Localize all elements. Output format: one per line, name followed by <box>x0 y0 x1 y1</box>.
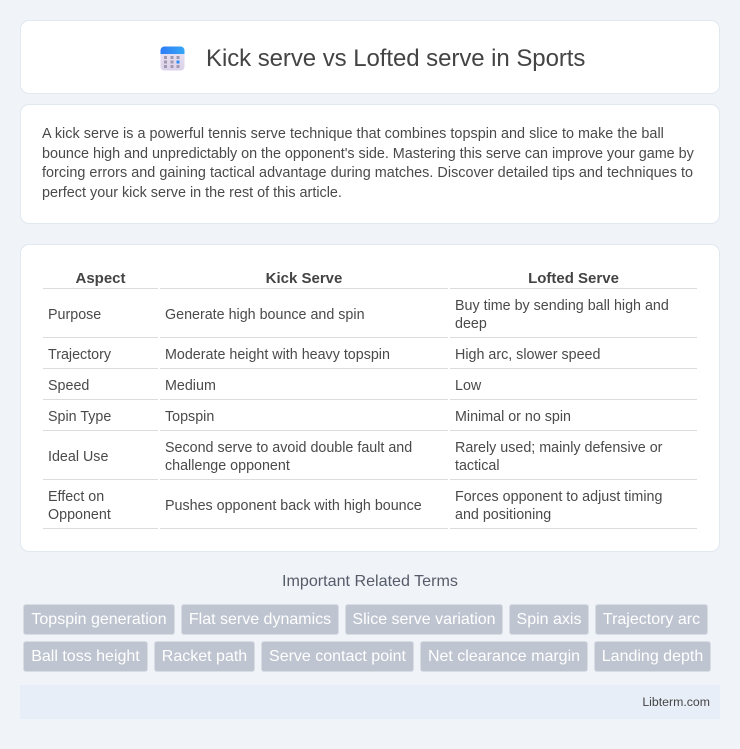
row: effect on opponent: and positioning <box>455 507 551 523</box>
intro paragraph: bounce high and unpredictably on the opponent's side. Mastering this serve can improve your game by <box>42 146 694 162</box>
row: effect on opponent <box>48 489 662 523</box>
tag: Slice serve variation <box>352 611 496 628</box>
tag: Flat serve dynamics <box>189 611 331 628</box>
tag <box>23 604 175 635</box>
table header: lofted serve: Lofted Serve <box>528 270 619 287</box>
intro paragraph: forcing errors and gaining tactical advantage during matches. Discover detailed tips and techniques to <box>42 165 693 181</box>
tag <box>23 641 148 672</box>
row: speed: Low <box>455 378 481 394</box>
row: ideal use: tactical <box>455 458 500 474</box>
tag: Topspin generation <box>31 611 167 628</box>
row: speed: Speed <box>48 378 89 394</box>
tag <box>595 604 708 635</box>
row: purpose: Purpose <box>48 307 101 323</box>
tag <box>181 604 339 635</box>
row: effect on opponent: Opponent <box>48 507 111 523</box>
intro paragraph <box>42 126 694 200</box>
row: speed <box>48 378 482 394</box>
tag <box>345 604 503 635</box>
tag <box>594 641 711 672</box>
tag <box>420 641 588 672</box>
row: purpose <box>48 298 669 332</box>
tag: Net clearance margin <box>428 648 580 665</box>
row: ideal use <box>48 440 662 474</box>
tag: Racket path <box>162 648 247 665</box>
row: spin type <box>48 409 571 425</box>
row: trajectory: Trajectory <box>48 347 111 363</box>
panel: intro text <box>20 104 720 224</box>
icon: calendar <box>160 46 184 70</box>
row: trajectory: High arc, slower speed <box>455 347 600 363</box>
footer credit: Libterm.com <box>642 695 710 709</box>
row: effect on opponent: Effect on <box>48 489 104 505</box>
panel: header <box>20 20 720 94</box>
tag: Ball toss height <box>31 648 140 665</box>
row: purpose: deep <box>455 316 487 332</box>
row: trajectory: Moderate height with heavy topspin <box>165 347 390 363</box>
panel: comparison table <box>20 244 720 552</box>
row: ideal use: challenge opponent <box>165 458 290 474</box>
row: purpose: Buy time by sending ball high and <box>455 298 669 314</box>
row: ideal use: Second serve to avoid double fault and <box>165 440 412 456</box>
table header: aspect: Aspect <box>75 270 126 287</box>
tag <box>261 641 414 672</box>
footer <box>20 685 720 719</box>
tag <box>154 641 255 672</box>
heading: related terms: Important Related Terms <box>282 572 458 590</box>
table header: kick serve: Kick Serve <box>266 270 342 287</box>
tag: Serve contact point <box>269 648 406 665</box>
row: purpose: Generate high bounce and spin <box>165 307 365 323</box>
row: trajectory <box>48 347 600 363</box>
row: spin type: Spin Type <box>48 409 111 425</box>
row: spin type: Minimal or no spin <box>455 409 571 425</box>
tags: related terms <box>23 604 711 672</box>
tag: Spin axis <box>517 611 581 628</box>
row: effect on opponent: Pushes opponent back with high bounce <box>165 498 422 514</box>
intro paragraph: A kick serve is a powerful tennis serve technique that combines topspin and slice to make the ball <box>42 126 664 142</box>
title: Kick serve vs Lofted serve in Sports <box>206 45 585 72</box>
intro paragraph: perfect your kick serve in the rest of this article. <box>42 184 342 200</box>
tag <box>509 604 589 635</box>
row: ideal use: Ideal Use <box>48 449 108 465</box>
tag: Trajectory arc <box>603 611 700 628</box>
row: effect on opponent: Forces opponent to adjust timing <box>455 489 662 505</box>
tag: Landing depth <box>602 648 703 665</box>
row: ideal use: Rarely used; mainly defensive or <box>455 440 662 456</box>
row: spin type: Topspin <box>165 409 214 425</box>
row: speed: Medium <box>165 378 216 394</box>
